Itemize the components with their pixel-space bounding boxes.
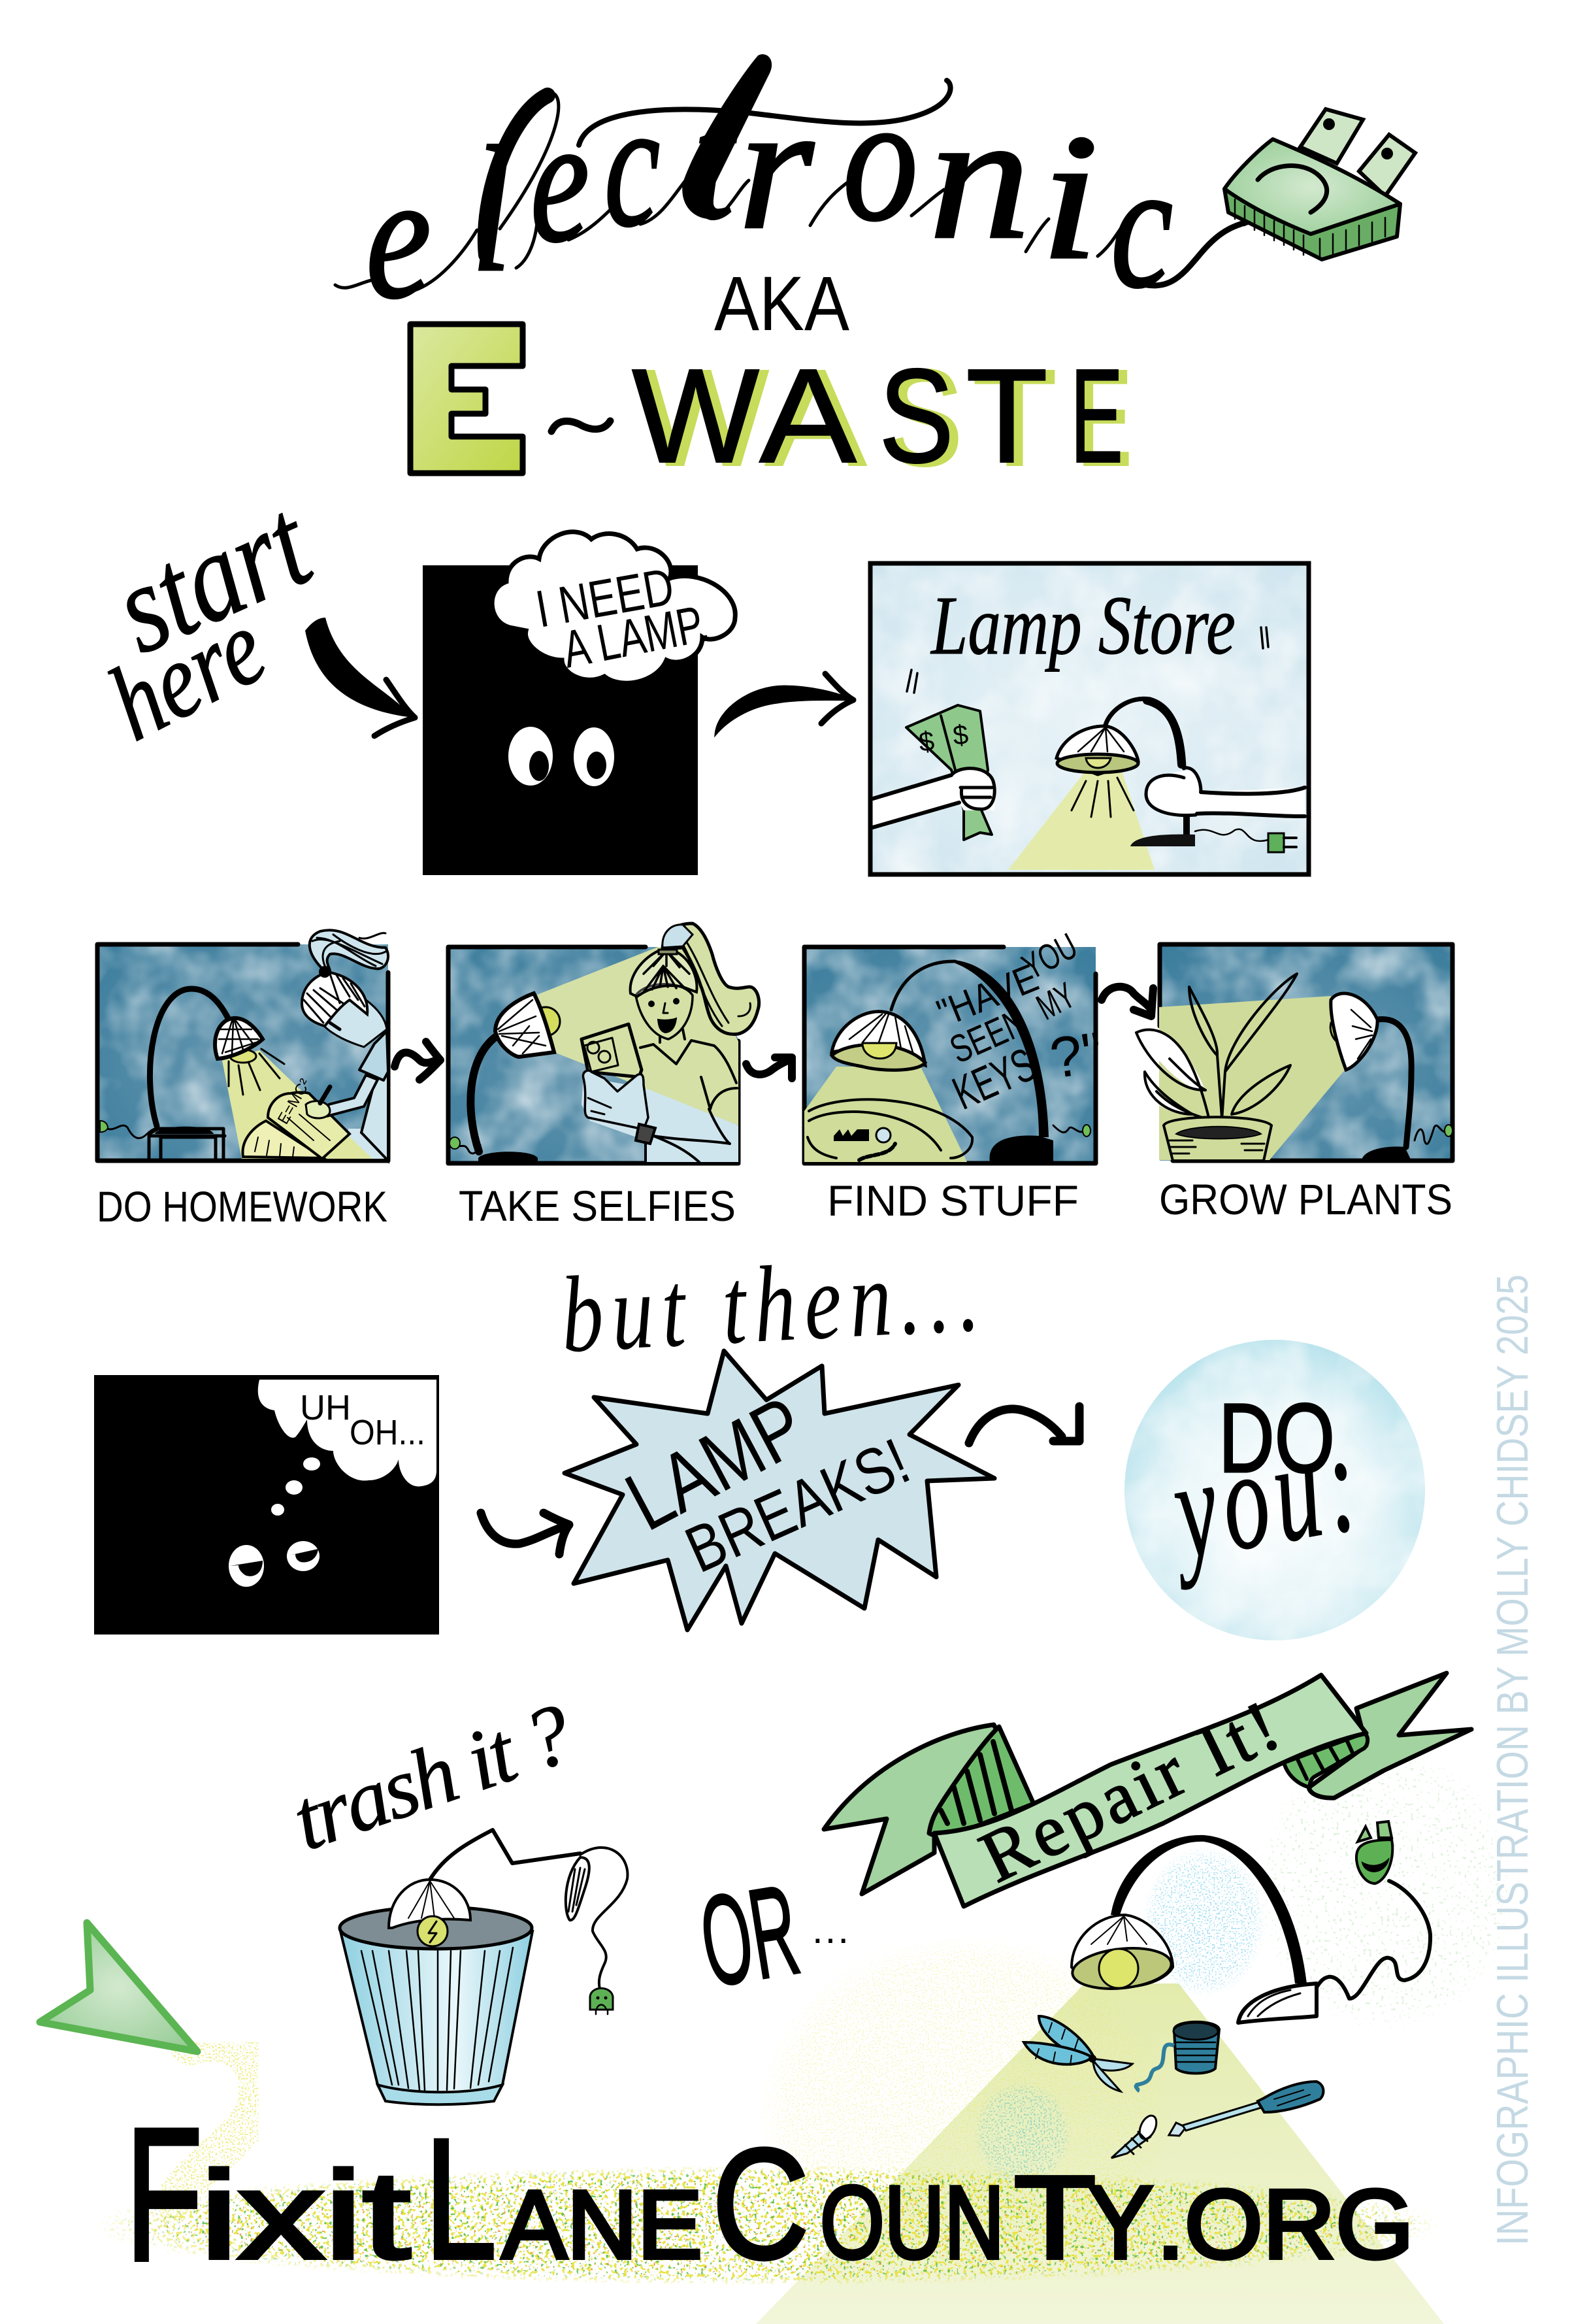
book: E=MC²: [274, 1076, 314, 1127]
title: WASTE: E: [1078, 343, 1131, 493]
ponytail: [663, 923, 759, 1035]
head: [631, 949, 697, 1039]
label: take selfies: TAKE SELFIES: [459, 1182, 736, 1230]
light beam: repair lamp: [756, 1984, 1444, 2324]
burst: lamp breaks: [565, 1351, 994, 1630]
bubble text: I NEED: [531, 557, 678, 639]
arrow: homework to selfies: [395, 1042, 440, 1080]
website url: .ORG: [1156, 2169, 1414, 2279]
plant: [1136, 974, 1297, 1124]
panel: uh oh black: [94, 1375, 439, 1635]
title: electronic: l: [472, 109, 512, 308]
title: electronic: c: [1111, 125, 1173, 325]
keys: [834, 1128, 895, 1160]
money: $: [917, 725, 936, 757]
title: WASTE: A: [767, 343, 864, 493]
do you text: DO: [1219, 1383, 1335, 1493]
uh oh text: OH...: [350, 1413, 425, 1452]
ribbon text: Repair It!: [968, 1685, 1291, 1898]
uh oh text: UH: [300, 1388, 351, 1427]
title: electronic: r: [738, 67, 814, 266]
can body: [340, 1907, 533, 2104]
panel: find stuff: [804, 925, 1107, 1163]
hand and pen: [306, 1101, 330, 1118]
right tail: [1309, 1673, 1471, 1798]
beam: [804, 1067, 967, 1162]
beam: [222, 1050, 372, 1159]
label: find stuff: FIND STUFF: [827, 1176, 1079, 1225]
title: WASTE: T: [966, 341, 1048, 491]
title: WASTE: T: [974, 343, 1056, 493]
website url: Y: [1088, 2165, 1153, 2280]
arrow: selfies to find stuff: [746, 1057, 792, 1078]
book: [242, 1076, 350, 1159]
panel: lamp store: [870, 563, 1309, 874]
bubble text: [531, 557, 713, 679]
icon: scissors: [1024, 2016, 1132, 2091]
tilde: [551, 421, 610, 431]
website url: L: [425, 2103, 497, 2295]
text: but then: but then...: [558, 1234, 982, 1376]
desk behind: [348, 1129, 388, 1159]
lamp: [100, 989, 284, 1138]
panel: do homework: [96, 930, 388, 1161]
speech text: SEEN: [943, 1000, 1033, 1072]
right hand: [1146, 768, 1305, 816]
arrow: find stuff to plants: [1102, 987, 1153, 1016]
icon: green arrow: [40, 1923, 197, 2051]
cloud: [258, 1380, 436, 1486]
arrow: to lamp breaks: [481, 1513, 569, 1554]
title: electronic: e: [366, 137, 431, 335]
eyes: [508, 727, 614, 786]
sparkle dust: [91, 1745, 1516, 2287]
circle: do you: [1124, 1340, 1425, 1640]
title: WASTE: A: [759, 341, 857, 491]
label: grow plants: GROW PLANTS: [1159, 1175, 1452, 1223]
icon: thread spool: [1136, 2022, 1219, 2091]
speech text: ?": [1046, 1020, 1107, 1091]
speech text: KEYS: [945, 1038, 1043, 1120]
title: electronic: c: [604, 65, 660, 263]
burst text: LAMP: [612, 1379, 820, 1549]
text: or: [691, 1857, 851, 2014]
sad plug: [590, 1988, 613, 2014]
icon: trash can with broken lamp: [340, 1830, 627, 2104]
right fold: [1284, 1733, 1368, 1787]
title: WASTE: W: [632, 341, 759, 491]
store title: Lamp Store: [930, 579, 1236, 672]
body: [361, 1029, 388, 1161]
text: start here: [90, 471, 331, 763]
credit: vertical illustrator line: INFOGRAPHIC ILLUSTRATION BY MOLLY CHIDSEY 2025: [1488, 1274, 1537, 2246]
speech text: [931, 925, 1107, 1120]
website url: ixit: [200, 2146, 410, 2285]
lamp: [450, 993, 560, 1163]
arm and hand light: [582, 1077, 738, 1162]
title: WASTE: E: [1070, 341, 1123, 491]
hair: [302, 972, 367, 1026]
ponytail: [310, 930, 388, 971]
happy plug: [1356, 1821, 1392, 1884]
title: WASTE: S: [879, 341, 954, 491]
thought bubble: [492, 532, 735, 683]
icon: sad plug with cord: [1134, 109, 1415, 286]
title: electronic: i: [1040, 97, 1099, 296]
lamp: [832, 960, 1090, 1162]
website url: C: [712, 2116, 809, 2291]
title: electronic: n: [929, 76, 1030, 276]
website url: F: [125, 2089, 203, 2300]
burst text: [612, 1379, 920, 1587]
broken lamp: [389, 1830, 627, 2014]
phone and hand: [582, 1024, 655, 1144]
left hand: [873, 769, 994, 827]
table: [149, 1129, 225, 1160]
left tail: [824, 1725, 1034, 1894]
panel: take selfies: [447, 923, 759, 1163]
website url: OUN: [820, 2165, 1004, 2280]
beam: [1159, 996, 1345, 1160]
girl: [302, 930, 388, 1161]
speech text: YOU: [1015, 925, 1084, 988]
title: electronic: [335, 54, 1173, 335]
left fold: [929, 1727, 1034, 1836]
website url: ANE: [502, 2171, 702, 2279]
plate: [809, 1099, 972, 1158]
speech text: MY: [1030, 974, 1081, 1028]
lamp: [1057, 699, 1296, 852]
title: electronic: t: [694, 57, 737, 256]
text: trash it: trash it ?: [281, 1684, 583, 1868]
title: electronic: o: [843, 59, 918, 258]
title: WASTE: S: [887, 343, 962, 493]
title: electronic: e: [531, 80, 589, 279]
do you text: you:: [1154, 1402, 1375, 1591]
body lines: [640, 1029, 737, 1162]
website url: T: [1014, 2152, 1096, 2283]
banner: repair it: [824, 1673, 1471, 1906]
light beam: [1008, 771, 1155, 870]
bubble text: A LAMP.: [558, 593, 713, 679]
arrow: to do you: [969, 1406, 1079, 1443]
icon: screw: [1111, 2113, 1160, 2158]
text: or: ...: [812, 1908, 851, 1951]
icon: repaired lamp: [1070, 1821, 1430, 2023]
title: WASTE: [632, 341, 1131, 493]
title: WASTE: W: [640, 343, 767, 493]
beam: [537, 947, 738, 1125]
text: AKA: AKA: [714, 261, 849, 347]
thought dots: [271, 1457, 320, 1516]
sleepy eyes: [229, 1541, 320, 1587]
text: start here: here: [90, 586, 283, 763]
money: $: [951, 719, 970, 751]
ribbon center: [934, 1675, 1366, 1906]
arrow: to lamp store: [715, 674, 853, 735]
speech text: "HAVE: [931, 955, 1044, 1035]
arrow: start to panel: [305, 618, 415, 736]
face: [322, 993, 387, 1047]
pot: [1164, 1117, 1271, 1161]
title: big letter E: [410, 324, 523, 473]
sparkle marks: [907, 627, 1268, 693]
text: or: OR: [691, 1857, 808, 2014]
panel: black square with I need a lamp: [423, 532, 735, 875]
burst text: BREAKS!: [675, 1424, 920, 1587]
icon: screwdriver: [1169, 2082, 1323, 2136]
uh oh text: [300, 1388, 425, 1452]
lamp: [1330, 993, 1452, 1161]
label: do homework: DO HOMEWORK: [97, 1182, 387, 1231]
panel: grow plants: [1136, 944, 1452, 1161]
money: [906, 705, 992, 840]
text: start here: start: [94, 471, 331, 680]
